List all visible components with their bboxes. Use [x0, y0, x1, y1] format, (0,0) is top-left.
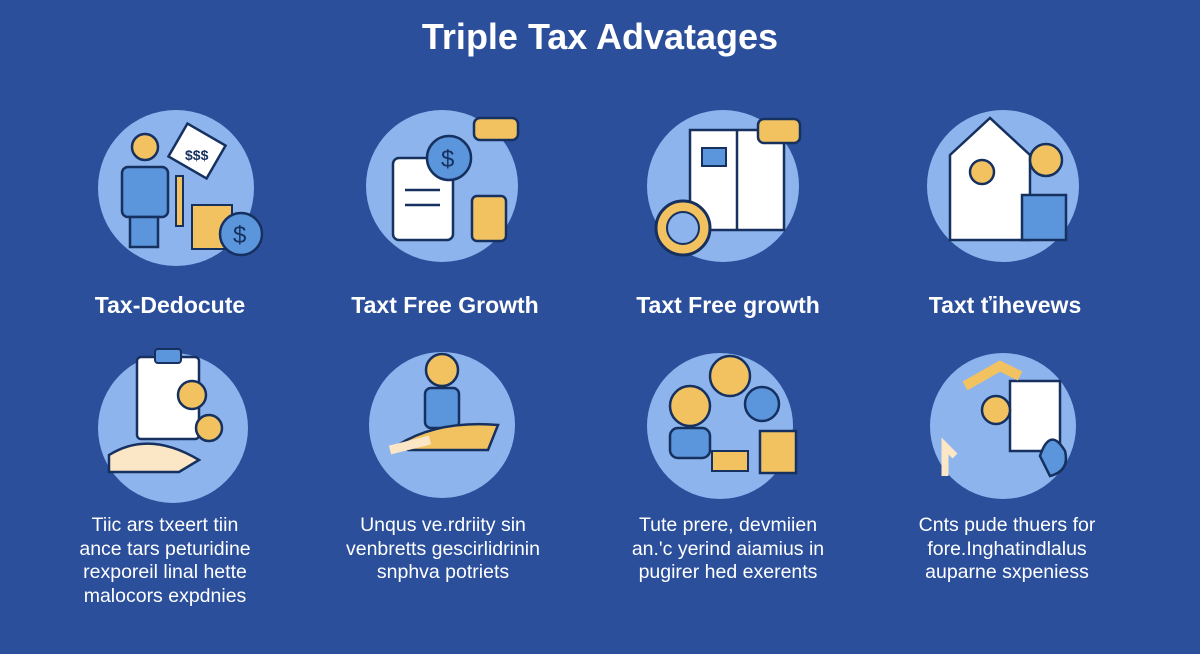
icon: house with coins — [927, 110, 1079, 262]
description 1 — [79, 514, 251, 606]
icon: document and hands — [930, 353, 1076, 499]
icon: tablet with dollar: $ — [441, 146, 454, 173]
icon: person with sign and coins: $ — [233, 222, 246, 249]
heading 3: Taxt Free growth — [636, 292, 820, 318]
icon: child with hand — [369, 352, 515, 498]
description 3: Tute prere, devmiien — [639, 514, 817, 536]
description 1: rexporeil linal hette — [83, 561, 247, 583]
description 3 — [632, 514, 824, 583]
heading 4: Taxt ťihevews — [929, 292, 1081, 318]
description 1: ance tars peturidine — [79, 538, 251, 560]
description 1: malocors expdnies — [84, 584, 246, 606]
description 4: fore.Inghatindlalus — [927, 538, 1087, 560]
description 2: snphva potriets — [377, 561, 509, 583]
description 2 — [346, 514, 540, 583]
icon: person with sign and coins: $$$ — [185, 147, 209, 163]
description 2: venbretts gescirlidrinin — [346, 538, 540, 560]
heading 2: Taxt Free Growth — [351, 292, 539, 318]
description 4: auparne sxpeniess — [925, 561, 1089, 583]
icon: person with sign and coins — [98, 110, 262, 266]
icon: open book with chart — [647, 110, 800, 262]
title: Triple Tax Advatages — [422, 16, 778, 57]
description 2: Unqus ve.rdriity sin — [360, 514, 526, 536]
heading 1: Tax-Dedocute — [95, 292, 245, 318]
description 3: an.'c yerind aiamius in — [632, 538, 824, 560]
icon: person with coins and gear — [647, 353, 796, 499]
description 4: Cnts pude thuers for — [919, 514, 1095, 536]
description 4 — [919, 514, 1096, 583]
description 3: pugirer hed exerents — [639, 561, 817, 583]
icon: clipboard in hand — [98, 349, 248, 503]
description 1: Tiic ars txeert tiin — [92, 514, 238, 536]
icon: tablet with dollar — [366, 110, 518, 262]
